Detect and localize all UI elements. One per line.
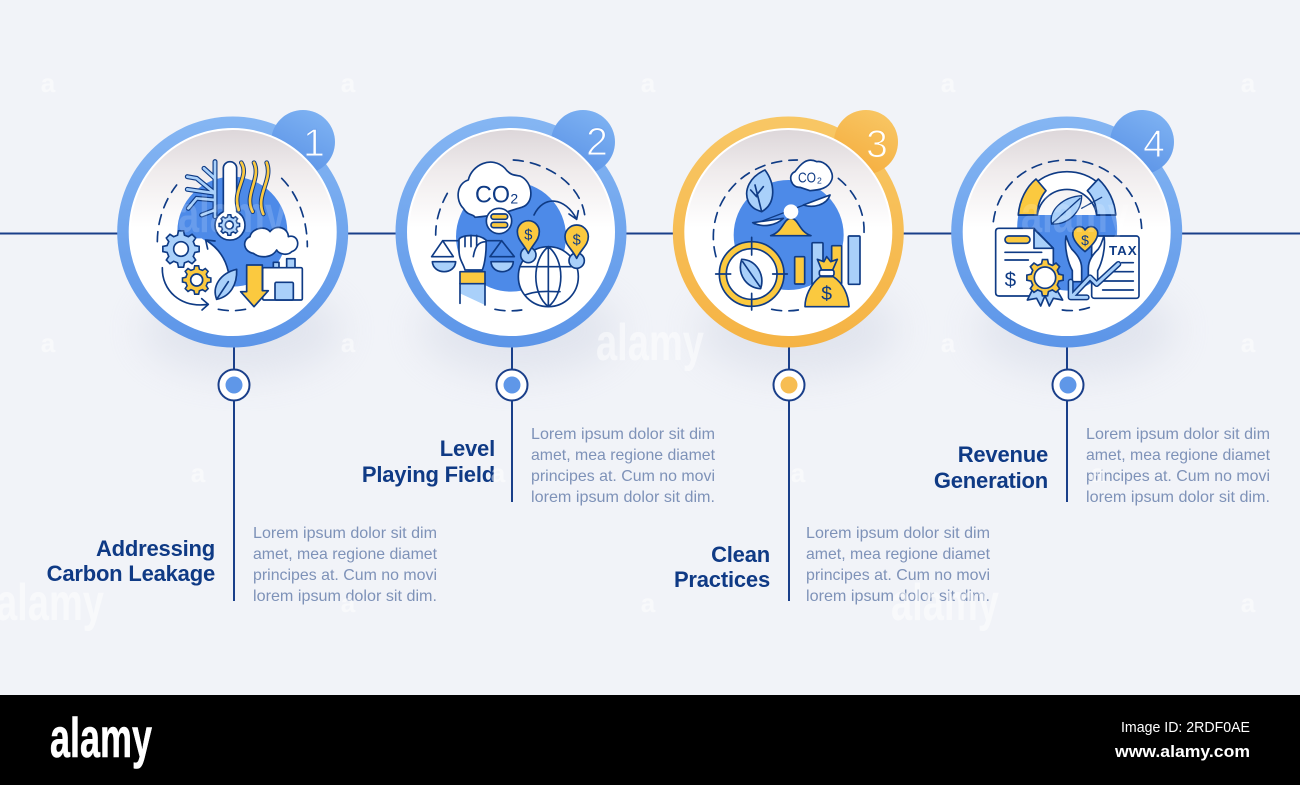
timeline horizontal line (0, 232, 1300, 234)
body text 3: lorem ipsum dolor sit dim. (806, 588, 990, 605)
body text 3: principes at. Cum no movi (806, 567, 990, 584)
watermarks: a (41, 68, 56, 98)
watermarks: a (491, 458, 506, 488)
icon: CO2 cloud, scales, globe: CO (475, 181, 510, 208)
heading: revenue generation (934, 442, 1048, 493)
number 3: 3 (866, 123, 888, 166)
watermarks: a (941, 68, 956, 98)
body text 1: amet, mea regione diamet (253, 546, 438, 563)
icon: CO2 cloud, scales, globe: 2 (510, 190, 518, 206)
number 2: 2 (586, 121, 608, 164)
panel: step 2 (362, 110, 716, 506)
body text 2: principes at. Cum no movi (531, 468, 715, 485)
body text 2: Lorem ipsum dolor sit dim (531, 426, 715, 443)
ring 1 (117, 110, 348, 348)
ring 4 (951, 110, 1182, 348)
icon: balance, target leaf, money bag: CO (798, 170, 816, 186)
watermarks: alamy (596, 314, 704, 372)
watermarks: a (341, 588, 356, 618)
body text 1: principes at. Cum no movi (253, 567, 437, 584)
number 1: 1 (303, 122, 325, 165)
icon: CO2 cloud, scales, globe: $ (524, 227, 532, 243)
icon: balance, target leaf, money bag: 2 (817, 175, 822, 185)
panel: step 4 (934, 110, 1271, 506)
body text 2 (531, 426, 716, 506)
body text 4: Lorem ipsum dolor sit dim (1086, 426, 1270, 443)
watermarks: a (1241, 588, 1256, 618)
icon: gauge, document, tax, hands: $ (1005, 269, 1017, 292)
icon: balance, target leaf, money bag: $ (821, 284, 832, 305)
icon: gauge, document, tax, hands: $ (1081, 232, 1089, 248)
heading: revenue generation: Generation (934, 468, 1048, 493)
watermarks (0, 68, 1256, 632)
watermarks: alamy (178, 186, 286, 244)
watermarks: a (1241, 68, 1256, 98)
watermarks: alamy (891, 574, 999, 632)
watermarks: alamy (0, 574, 104, 632)
body text 2: lorem ipsum dolor sit dim. (531, 489, 715, 506)
connector with node: step 4 (1052, 345, 1084, 502)
body text 3 (806, 525, 991, 605)
heading: clean practices (674, 542, 770, 592)
body text 4: principes at. Cum no movi (1086, 468, 1270, 485)
body text 4 (1086, 426, 1271, 506)
watermarks: a (941, 328, 956, 358)
icon: thermometer, gears, factory (157, 162, 307, 311)
connector with node: step 3 (774, 345, 804, 601)
icon: CO2 cloud, scales, globe (432, 160, 588, 311)
watermarks: a (191, 458, 206, 488)
heading: revenue generation: Revenue (958, 442, 1048, 467)
heading: addressing carbon leakage: Addressing (96, 536, 215, 561)
body text 3: Lorem ipsum dolor sit dim (806, 525, 990, 542)
body text 2: amet, mea regione diamet (531, 447, 716, 464)
watermarks: a (641, 68, 656, 98)
heading: addressing carbon leakage (47, 536, 215, 586)
connector with node: step 2 (496, 345, 528, 502)
watermarks: a (1241, 328, 1256, 358)
watermarks: a (341, 328, 356, 358)
body text 3: amet, mea regione diamet (806, 546, 991, 563)
icon: gauge, document, tax, hands (993, 160, 1142, 311)
watermarks: a (41, 328, 56, 358)
panel: step 1 (47, 110, 438, 605)
heading: addressing carbon leakage: Carbon Leakage (47, 561, 215, 586)
icon: gauge, document, tax, hands: TAX (1109, 243, 1138, 258)
watermarks: a (641, 588, 656, 618)
body text 1: Lorem ipsum dolor sit dim (253, 525, 437, 542)
footer bar (0, 695, 1300, 785)
body text 1: lorem ipsum dolor sit dim. (253, 588, 437, 605)
icon: balance, target leaf, money bag (713, 160, 864, 311)
watermarks: a (1091, 458, 1106, 488)
heading: level playing field (362, 436, 495, 487)
panel: step 3 (673, 110, 991, 605)
watermarks: a (341, 68, 356, 98)
watermarks: a (791, 458, 806, 488)
connector with node: step 1 (218, 345, 250, 601)
heading: clean practices: Clean (711, 542, 770, 567)
ring 2 (396, 110, 626, 348)
body text 4: lorem ipsum dolor sit dim. (1086, 489, 1270, 506)
footer image id: Image ID: 2RDF0AE (1121, 719, 1250, 736)
footer url: www.alamy.com (1114, 742, 1250, 761)
watermarks: alamy (1021, 186, 1129, 244)
body text 4: amet, mea regione diamet (1086, 447, 1271, 464)
body text 1 (253, 525, 438, 605)
footer logo: alamy (50, 706, 152, 769)
heading: level playing field: Playing Field (362, 462, 495, 487)
heading: level playing field: Level (440, 436, 495, 461)
number 4: 4 (1143, 123, 1165, 166)
icon: CO2 cloud, scales, globe: $ (573, 233, 581, 249)
ring 3 (673, 110, 904, 348)
heading: clean practices: Practices (674, 567, 770, 592)
